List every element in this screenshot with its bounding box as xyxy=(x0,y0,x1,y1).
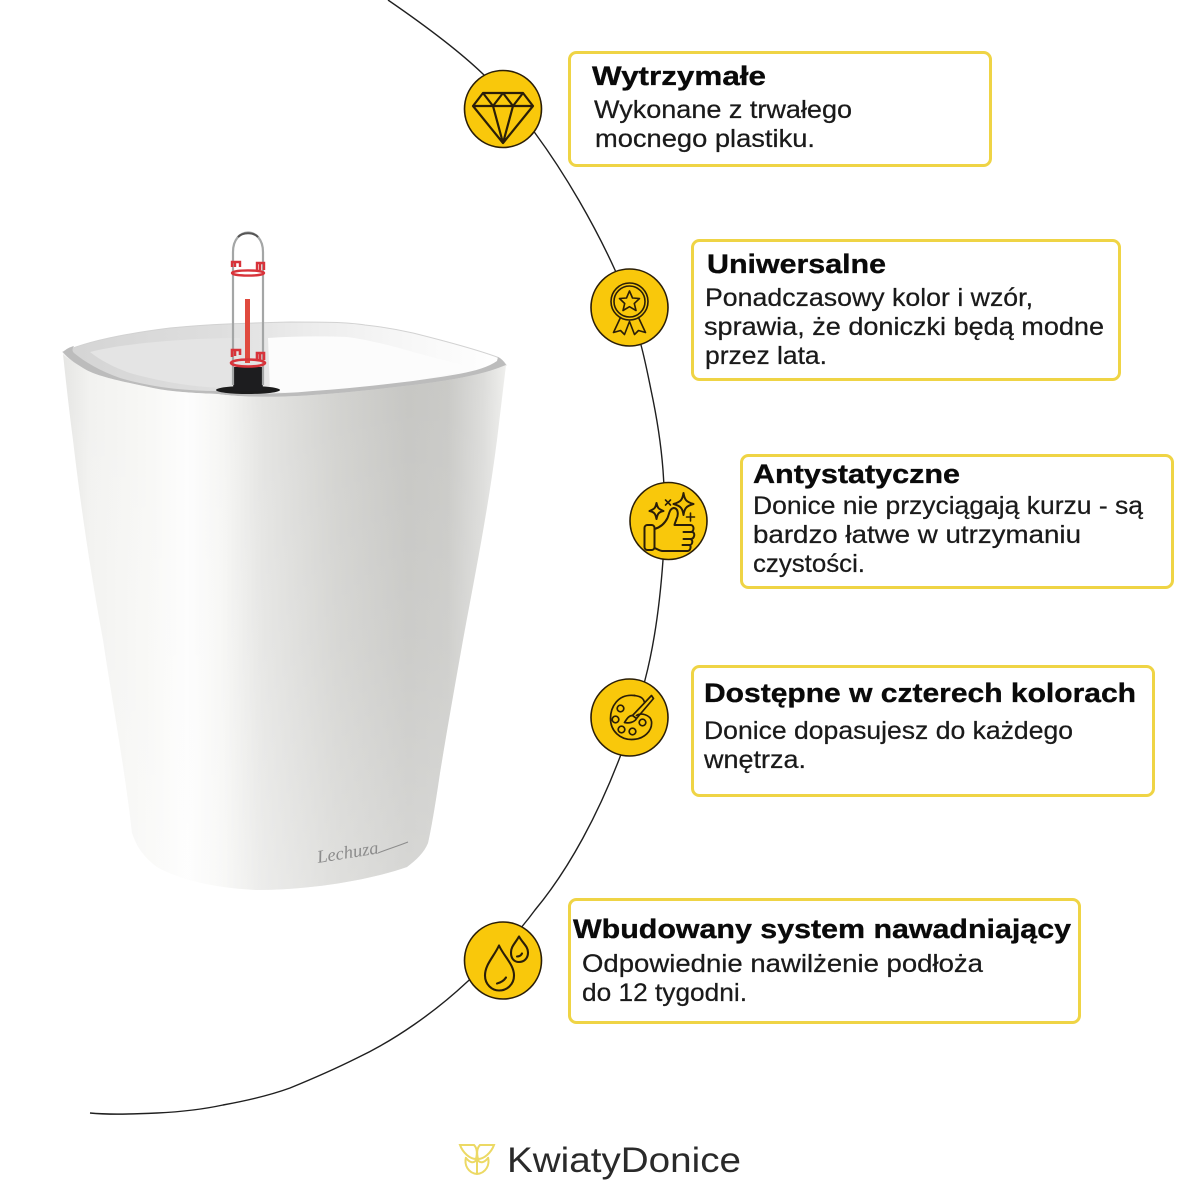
icon: painter's palette xyxy=(591,679,668,756)
logo wordmark: KwiatyDonice xyxy=(507,1141,741,1180)
description xyxy=(704,284,1104,370)
panel: Wytrzymałe xyxy=(570,52,990,166)
description: Ponadczasowy kolor i wzór, xyxy=(705,284,1033,312)
icon: water drops xyxy=(464,922,542,999)
description: bardzo łatwe w utrzymaniu xyxy=(753,521,1081,549)
description: Wykonane z trwałego xyxy=(594,96,852,124)
arc connecting the feature icons xyxy=(90,0,665,1114)
logo: KwiatyDonice xyxy=(460,1141,741,1180)
icon: butterfly logo mark xyxy=(460,1145,494,1174)
gauge glass tube xyxy=(233,232,263,385)
gauge base xyxy=(216,386,280,394)
icon: thumbs up with sparkles xyxy=(630,482,707,560)
heading: Antystatyczne xyxy=(753,459,960,489)
heading: Uniwersalne xyxy=(707,249,886,279)
heading: Wytrzymałe xyxy=(592,61,766,91)
pot basin white interior xyxy=(268,336,473,393)
description: Donice dopasujesz do każdego xyxy=(704,717,1073,745)
product photo: white self-watering pot xyxy=(63,232,506,890)
description: Odpowiednie nawilżenie podłoża xyxy=(582,950,983,978)
description: wnętrza. xyxy=(703,746,806,774)
description: mocnego plastiku. xyxy=(595,125,815,153)
pot body shading overlay xyxy=(63,354,506,890)
description: czystości. xyxy=(753,550,865,578)
pot engraved signature: Lechuza xyxy=(314,837,380,867)
description xyxy=(594,96,852,153)
description xyxy=(582,950,983,1007)
description xyxy=(703,717,1073,774)
description: przez lata. xyxy=(705,342,827,370)
gauge red rod xyxy=(245,299,250,363)
heading: Wbudowany system nawadniający xyxy=(573,914,1071,944)
panel: Wbudowany system nawadniający xyxy=(570,900,1080,1022)
panel: Antystatyczne xyxy=(742,456,1172,588)
icon: medal rosette xyxy=(591,269,668,346)
icon: diamond xyxy=(464,70,542,148)
description: do 12 tygodni. xyxy=(582,979,747,1007)
pot inner basin xyxy=(63,322,506,396)
panel: Dostępne w czterech kolorach xyxy=(692,666,1154,796)
heading: Dostępne w czterech kolorach xyxy=(704,678,1136,708)
panel: Uniwersalne xyxy=(692,240,1120,380)
water level gauge xyxy=(216,232,280,394)
description: sprawia, że doniczki będą modne xyxy=(704,313,1104,341)
pot body xyxy=(63,354,506,890)
gauge upper max ring xyxy=(232,262,264,276)
description xyxy=(753,492,1143,578)
gauge black socket xyxy=(233,367,263,391)
pot rim xyxy=(63,346,506,397)
gauge lower min ring xyxy=(231,350,265,366)
description: Donice nie przyciągają kurzu - są xyxy=(753,492,1143,520)
pot basin lighter shelf xyxy=(90,338,240,388)
